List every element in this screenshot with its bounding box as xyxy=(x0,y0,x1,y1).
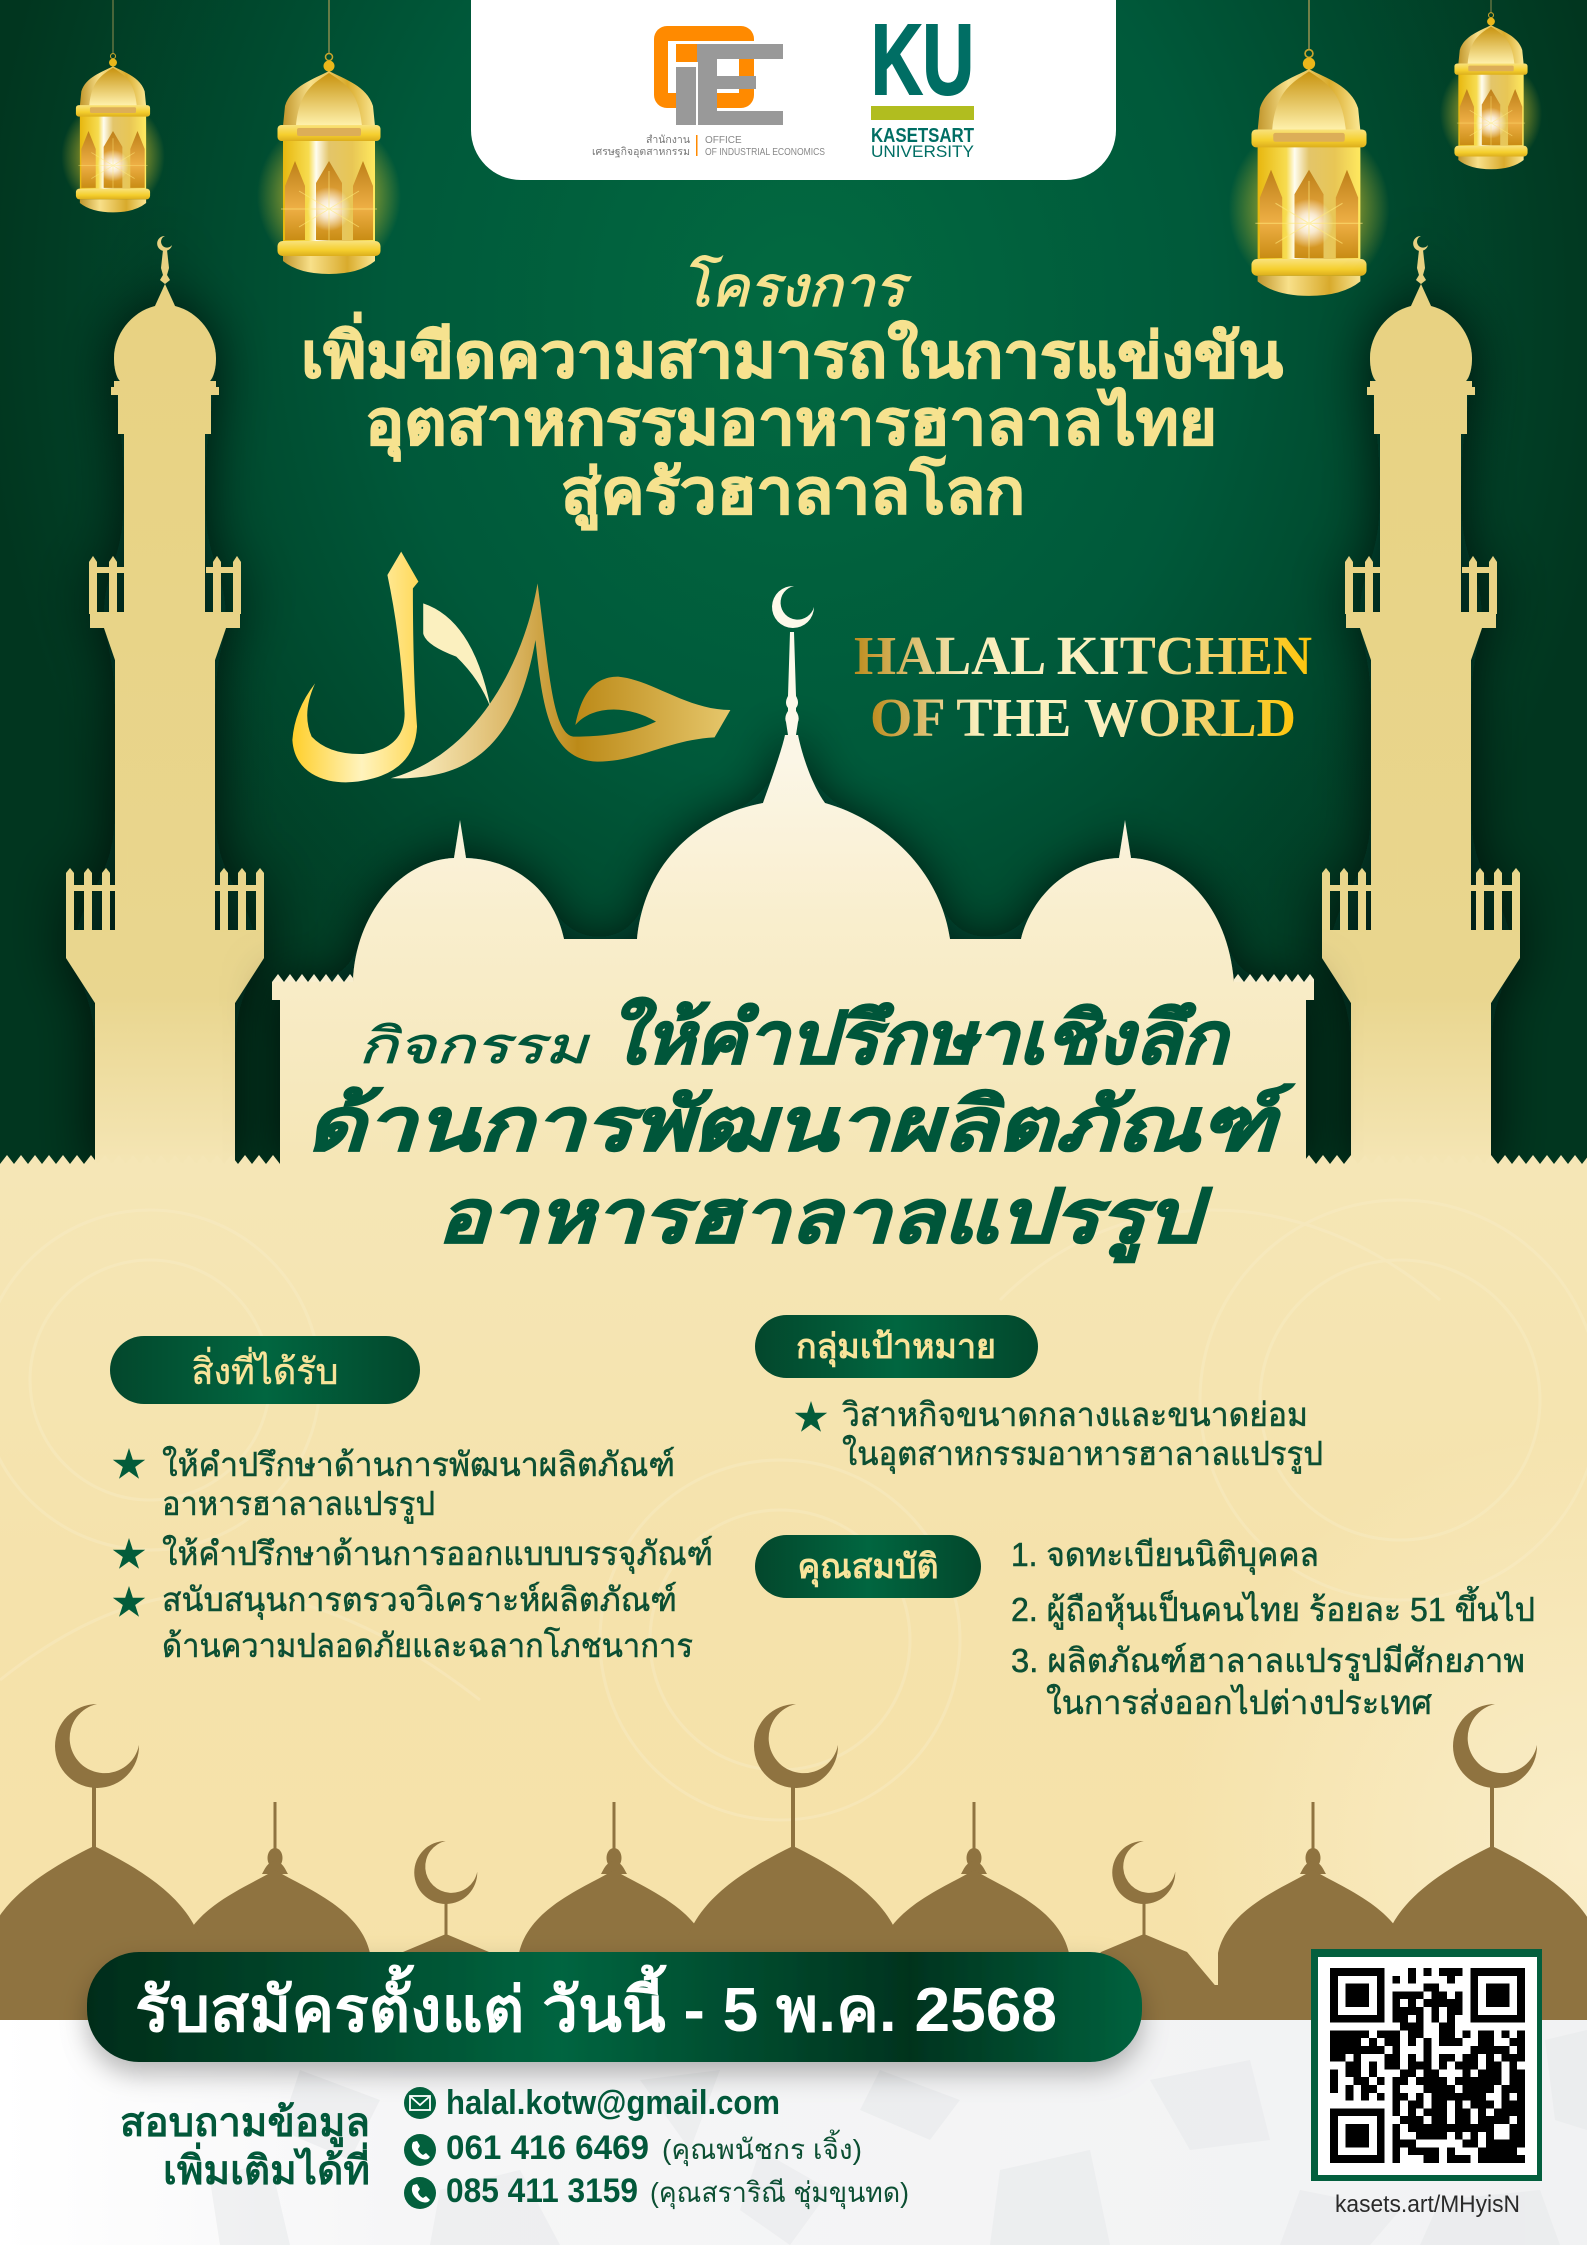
target group text xyxy=(795,1396,1323,1474)
pill: target group heading xyxy=(755,1315,1038,1378)
header panel with logos xyxy=(471,0,1116,180)
panel: benefits xyxy=(110,1336,713,1664)
target group text: ในอุตสาหกรรมอาหารฮาลาลแปรรูป xyxy=(842,1435,1323,1474)
pill: qualifications heading: คุณสมบัติ xyxy=(797,1548,939,1588)
qualifications list: 1. จดทะเบียนนิติบุคคล xyxy=(1011,1536,1319,1575)
qualifications list: 3. ผลิตภัณฑ์ฮาลาลแปรรูปมีศักยภาพ xyxy=(1011,1642,1525,1681)
logo: kasetsart university: KU xyxy=(871,4,974,116)
logo: office of industrial economics: OFFICE xyxy=(705,135,742,146)
activity heading: อาหารฮาลาลแปรรูป xyxy=(437,1175,1213,1263)
icon: phone xyxy=(404,2134,436,2166)
central mosque silhouette xyxy=(272,586,1314,1166)
lantern right xyxy=(1229,0,1389,296)
benefits list: ให้คำปรึกษาด้านการออกแบบบรรจุภัณฑ์ xyxy=(162,1535,713,1574)
registration deadline banner xyxy=(87,1952,1142,2062)
halal calligraphy xyxy=(292,552,730,782)
lantern far right xyxy=(1440,0,1542,169)
logo: kasetsart university: UNIVERSITY xyxy=(871,142,974,161)
benefits list: อาหารฮาลาลแปรรูป xyxy=(162,1485,435,1524)
project title: สู่ครัวฮาลาลโลก xyxy=(561,455,1025,530)
mosque domes silhouette xyxy=(0,1704,1587,2022)
logo: office of industrial economics: OF INDUSTRIAL ECONOMICS xyxy=(705,147,825,158)
project title: อุตสาหกรรมอาหารฮาลาลไทย xyxy=(365,387,1217,461)
logo: office of industrial economics: สำนักงาน xyxy=(646,134,690,146)
contact heading: เพิ่มเติมได้ที่ xyxy=(163,2142,370,2193)
benefits list: ด้านความปลอดภัยและฉลากโภชนาการ xyxy=(162,1627,693,1664)
pill: benefits heading: สิ่งที่ได้รับ xyxy=(192,1347,338,1392)
pill: qualifications heading xyxy=(755,1535,981,1598)
panel: target group xyxy=(755,1315,1323,1474)
left minaret xyxy=(66,236,264,1170)
halal kitchen of the world xyxy=(854,625,1312,748)
icon: email xyxy=(404,2087,436,2119)
contact details: (คุณพนัชกร เจิ้ง) xyxy=(662,2129,862,2167)
qualifications list xyxy=(1011,1536,1535,1721)
project title: โครงการ xyxy=(680,255,911,318)
activity heading: ให้คำปรึกษาเชิงลึก xyxy=(607,997,1232,1079)
pill: target group heading: กลุ่มเป้าหมาย xyxy=(796,1328,996,1368)
contact details: 061 416 6469 xyxy=(446,2129,649,2167)
contact details: (คุณสราริณี ชุ่มขุนทด) xyxy=(650,2177,909,2210)
target group text: วิสาหกิจขนาดกลางและขนาดย่อม xyxy=(842,1396,1308,1433)
qualifications list: ในการส่งออกไปต่างประเทศ xyxy=(1046,1684,1432,1721)
benefits list: สนับสนุนการตรวจวิเคราะห์ผลิตภัณฑ์ xyxy=(162,1581,677,1620)
activity heading: กิจกรรม xyxy=(358,1018,591,1074)
halal kitchen of the world: OF THE WORLD xyxy=(870,687,1296,748)
icon: phone xyxy=(404,2177,436,2209)
sand lower background xyxy=(0,1155,1587,2024)
logo: office of industrial economics xyxy=(592,26,825,158)
activity heading: ด้านการพัฒนาผลิตภัณฑ์ xyxy=(306,1083,1295,1166)
benefits list xyxy=(113,1446,713,1664)
project title: เพิ่มขีดความสามารถในการแข่งขัน xyxy=(301,312,1283,391)
panel: qualifications xyxy=(755,1535,1535,1721)
benefits list: ให้คำปรึกษาด้านการพัฒนาผลิตภัณฑ์ xyxy=(162,1446,675,1483)
qualifications list: 2. ผู้ถือหุ้นเป็นคนไทย ร้อยละ 51 ขึ้นไป xyxy=(1011,1586,1535,1630)
halal kitchen of the world: HALAL KITCHEN xyxy=(854,625,1312,686)
qr code xyxy=(1311,1949,1542,2181)
footer white background xyxy=(0,2020,1587,2245)
pill: benefits heading xyxy=(110,1336,420,1404)
activity heading xyxy=(306,997,1295,1263)
qr caption: kasets.art/MHyisN xyxy=(1335,2191,1520,2218)
logo: office of industrial economics: เศรษฐกิจอุตสาหกรรม xyxy=(592,146,690,158)
project title xyxy=(301,255,1283,530)
green background xyxy=(0,0,1587,1180)
contact heading xyxy=(120,2101,370,2193)
logo: kasetsart university: KASETSART xyxy=(871,124,974,147)
contact details: halal.kotw@gmail.com xyxy=(446,2084,780,2122)
registration deadline banner: รับสมัครตั้งแต่ วันนี้ - 5 พ.ค. 2568 xyxy=(135,1964,1057,2045)
contact heading: สอบถามข้อมูล xyxy=(120,2101,370,2147)
contact details xyxy=(404,2084,909,2210)
icon: crescent xyxy=(772,586,814,628)
right minaret xyxy=(1322,236,1520,1170)
contact details: 085 411 3159 xyxy=(446,2172,638,2210)
logo: kasetsart university xyxy=(871,4,974,161)
lantern far left xyxy=(61,0,165,212)
lantern left xyxy=(257,0,401,274)
